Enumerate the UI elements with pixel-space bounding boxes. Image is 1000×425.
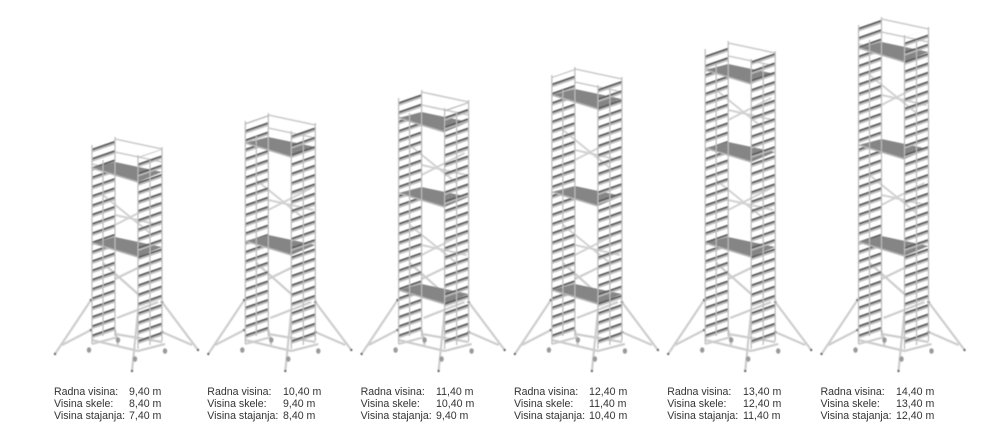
spec text tower 2: 8,40 m — [283, 410, 316, 422]
spec text tower 5: 13,40 m — [743, 386, 781, 398]
spec text tower 5: Visina stajanja: — [667, 410, 738, 422]
spec text tower 4: 10,40 m — [589, 410, 627, 422]
spec text tower 6 — [820, 386, 934, 422]
spec text tower 4: Visina stajanja: — [514, 410, 585, 422]
scaffold tower 3 — [360, 90, 506, 372]
spec text tower 4: 12,40 m — [589, 386, 627, 398]
spec text tower 1: 7,40 m — [129, 410, 162, 422]
spec text tower 5 — [667, 386, 781, 422]
spec text tower 5: 12,40 m — [743, 398, 781, 410]
spec text tower 1: 9,40 m — [129, 386, 162, 398]
spec text tower 3 — [361, 386, 474, 422]
spec text tower 3: Radna visina: — [361, 386, 425, 398]
spec text tower 5: Radna visina: — [667, 386, 731, 398]
spec text tower 2: 10,40 m — [283, 386, 321, 398]
spec text tower 2: Visina stajanja: — [207, 410, 278, 422]
spec text tower 3: 11,40 m — [436, 386, 474, 398]
spec text tower 3: 9,40 m — [436, 410, 469, 422]
scaffold tower 5 — [667, 41, 812, 372]
scaffold tower 1 — [54, 137, 199, 372]
spec text tower 5: Visina skele: — [667, 398, 726, 410]
spec text tower 1: Visina skele: — [54, 398, 113, 410]
spec text tower 4: 11,40 m — [589, 398, 627, 410]
scaffold tower 6 — [820, 17, 966, 372]
spec text tower 1: 8,40 m — [129, 398, 162, 410]
spec text tower 6: Radna visina: — [820, 386, 885, 398]
spec text tower 1 — [54, 386, 162, 422]
scaffold tower 2 — [207, 113, 352, 372]
spec text tower 2: 9,40 m — [283, 398, 316, 410]
spec text tower 2 — [207, 386, 321, 422]
spec text tower 3: Visina stajanja: — [361, 410, 432, 422]
spec text tower 2: Radna visina: — [207, 386, 272, 398]
spec text tower 6: Visina skele: — [820, 398, 880, 410]
scaffold tower 4 — [514, 67, 659, 372]
spec text tower 3: Visina skele: — [361, 398, 420, 410]
spec text tower 1: Radna visina: — [54, 386, 118, 398]
spec text tower 3: 10,40 m — [436, 398, 474, 410]
spec text tower 4: Radna visina: — [514, 386, 578, 398]
spec text tower 4 — [514, 386, 627, 422]
spec text tower 4: Visina skele: — [514, 398, 573, 410]
scaffold illustrations — [54, 17, 966, 372]
spec text tower 5: 11,40 m — [743, 410, 781, 422]
spec text tower 6: Visina stajanja: — [820, 410, 892, 422]
spec text tower 2: Visina skele: — [207, 398, 267, 410]
spec text tower 6: 14,40 m — [896, 386, 934, 398]
spec text tower 6: 13,40 m — [896, 398, 934, 410]
spec text tower 1: Visina stajanja: — [54, 410, 125, 422]
spec text tower 6: 12,40 m — [896, 410, 934, 422]
